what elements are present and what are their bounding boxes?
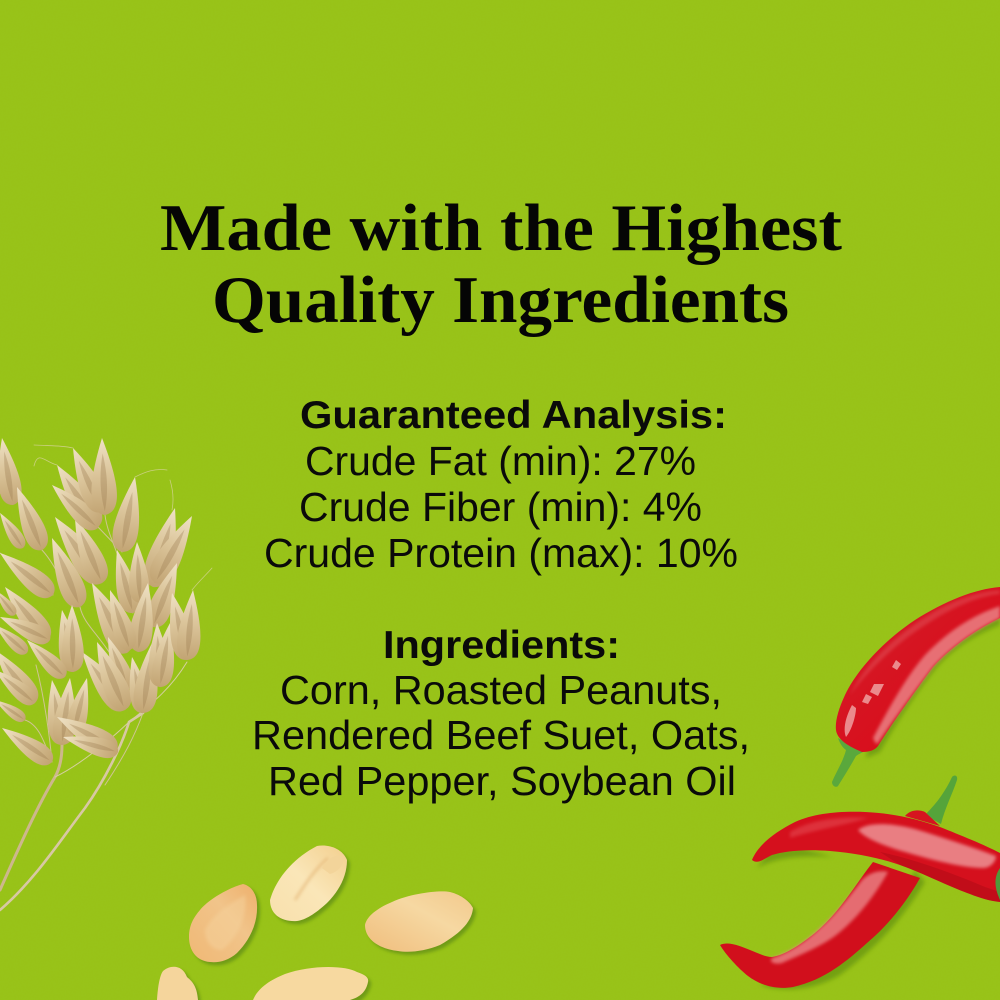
stem xyxy=(925,776,957,824)
peanut: centre xyxy=(270,846,347,921)
icon: oat sprig xyxy=(0,436,212,910)
oat spikelets xyxy=(0,436,205,770)
heading: ingredients: Ingredients: xyxy=(383,624,620,667)
stem xyxy=(832,738,863,787)
upper sheen xyxy=(790,818,868,838)
chili: horizontal xyxy=(752,812,1000,902)
pepper body xyxy=(752,812,1000,902)
dark underside xyxy=(880,852,1000,902)
pepper shadows xyxy=(757,610,1000,989)
heading: guaranteed analysis: Guaranteed Analysis: xyxy=(300,394,727,437)
highlight xyxy=(771,871,888,964)
crude protein: Crude Protein (max): 10% xyxy=(264,530,738,576)
stem end xyxy=(995,868,1000,900)
title: Quality Ingredients xyxy=(212,263,789,337)
peanut: bottom left xyxy=(157,967,198,1000)
title xyxy=(160,191,843,337)
pepper body xyxy=(720,862,920,988)
ingredient line 2: Rendered Beef Suet, Oats, xyxy=(252,712,750,758)
highlight xyxy=(858,824,996,868)
chili: top right xyxy=(832,587,1000,787)
peanut: right xyxy=(365,891,473,952)
icon: chili peppers xyxy=(720,587,1000,989)
highlight xyxy=(873,606,1000,744)
oat stems xyxy=(0,445,212,910)
peanut shadows xyxy=(160,849,476,1000)
icon: peanuts xyxy=(157,846,476,1000)
crude fiber: Crude Fiber (min): 4% xyxy=(299,484,702,530)
text block: guaranteed analysis xyxy=(264,394,738,576)
crude fat: Crude Fat (min): 27% xyxy=(305,438,696,484)
ingredient line 1: Corn, Roasted Peanuts, xyxy=(280,667,722,713)
peanut: left xyxy=(189,884,257,962)
upper body xyxy=(905,810,940,826)
chili: bottom xyxy=(720,776,957,988)
title: Made with the Highest xyxy=(160,191,843,265)
pepper body xyxy=(836,587,1000,752)
gloss spots xyxy=(845,660,901,737)
ingredient line 3: Red Pepper, Soybean Oil xyxy=(268,758,736,804)
text block: ingredients xyxy=(252,624,750,804)
upper sheen xyxy=(850,590,1000,695)
peanut: bottom centre xyxy=(253,967,368,1000)
